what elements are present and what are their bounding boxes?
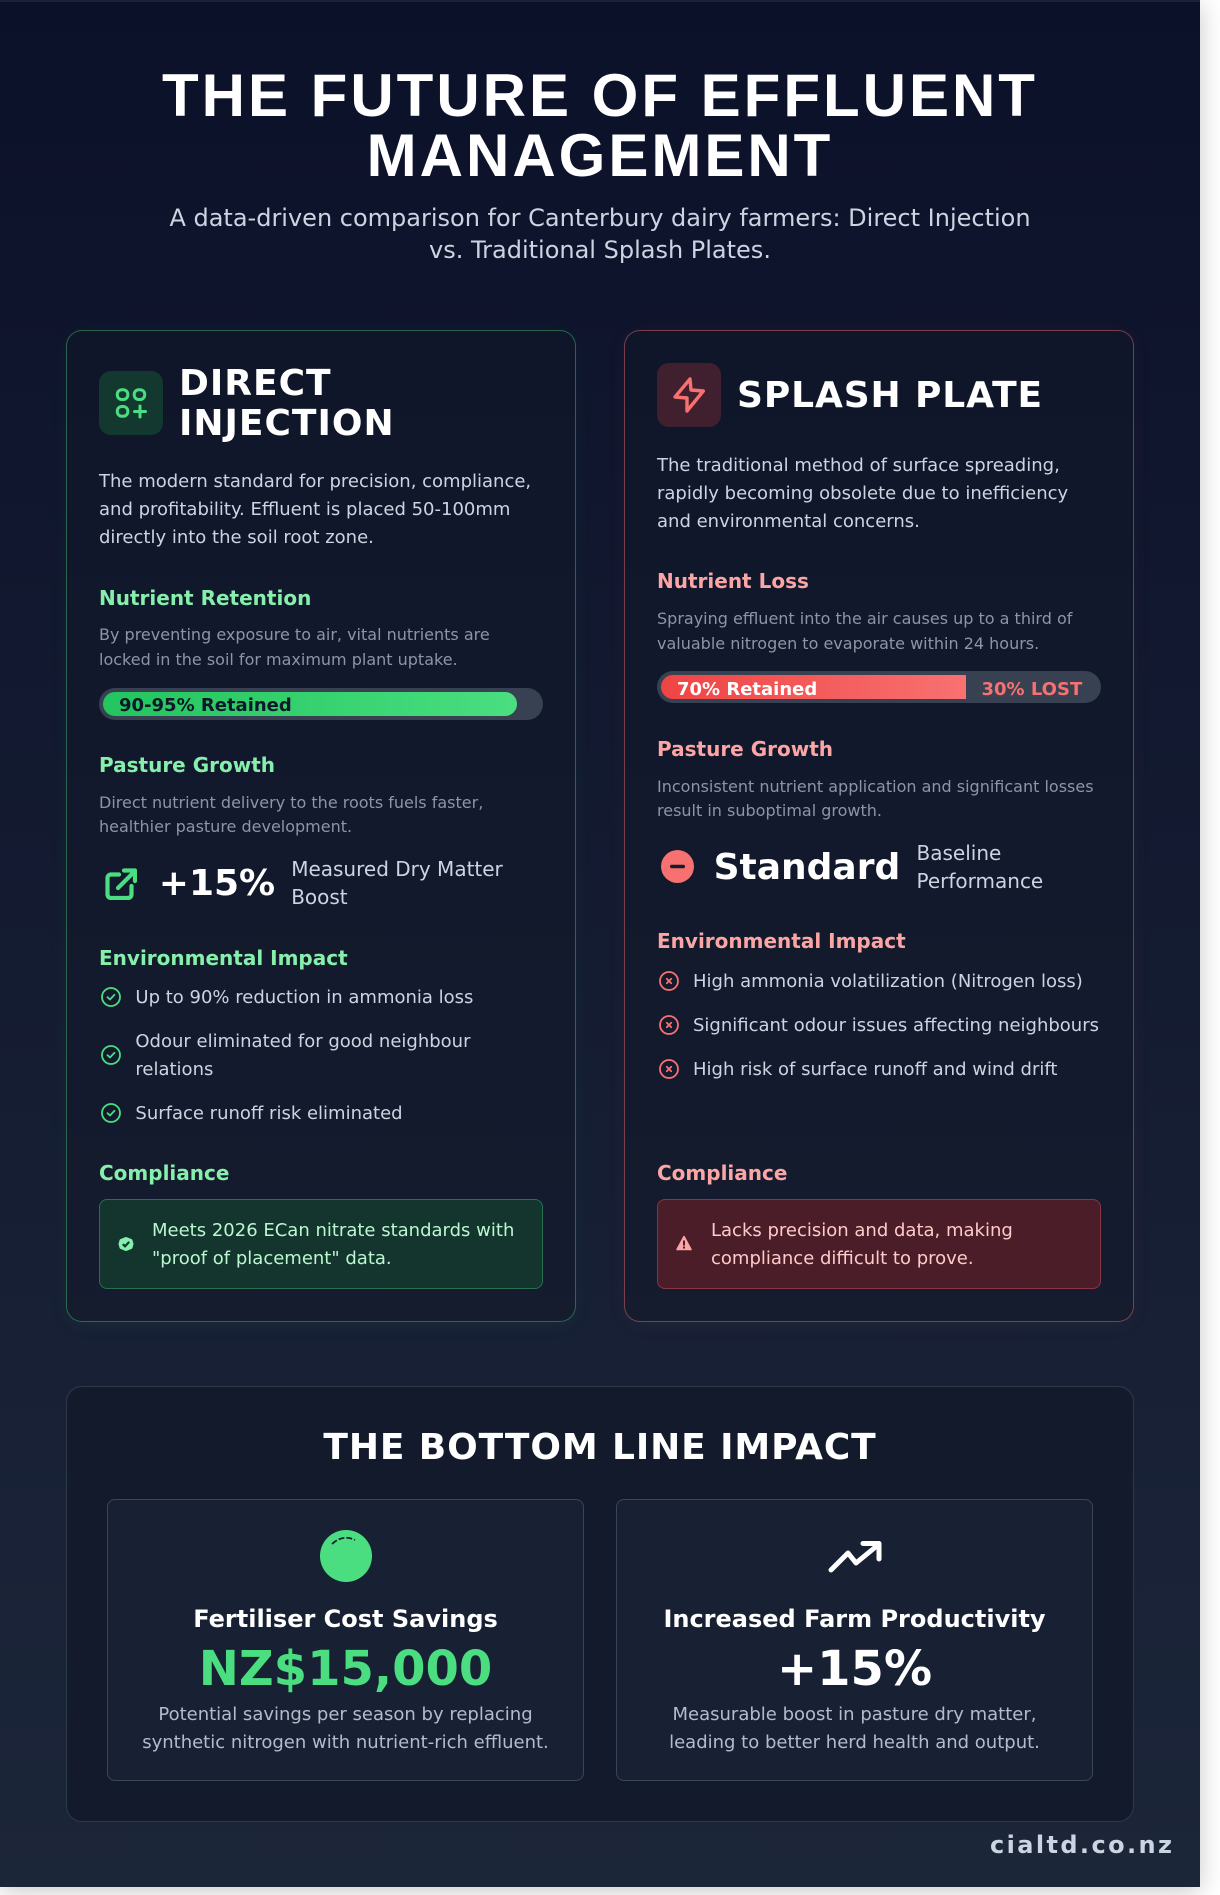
heading: pasture growth: Pasture Growth	[99, 753, 275, 777]
icon: cross	[659, 1059, 679, 1079]
pasture growth description: Inconsistent nutrient application and significant losses	[657, 777, 1094, 796]
heading: increased farm productivity: Increased Farm Productivity	[663, 1605, 1046, 1633]
progress bar: 90-95% retained	[99, 688, 543, 720]
title	[162, 62, 1038, 189]
list item: Odour eliminated for good neighbour	[135, 1031, 470, 1052]
icon: trending up arrow	[828, 1541, 882, 1572]
icon: splash plate	[657, 363, 721, 427]
heading: direct injection: DIRECT	[179, 362, 332, 404]
stat: standard: Standard	[714, 847, 900, 888]
stat: +15%: +15%	[159, 863, 275, 904]
pasture growth description: result in suboptimal growth.	[657, 801, 882, 820]
icon: minus circle	[661, 850, 694, 883]
list item: relations	[135, 1059, 213, 1080]
value: NZ$15,000: NZ$15,000	[199, 1641, 492, 1697]
stat label	[916, 840, 1043, 893]
compliance text: Meets 2026 ECan nitrate standards with	[152, 1220, 514, 1241]
heading: nutrient loss: Nutrient Loss	[657, 569, 809, 593]
title: MANAGEMENT	[367, 122, 833, 189]
icon: cross	[659, 1015, 679, 1035]
icon: check	[101, 987, 121, 1007]
nutrient retention description	[99, 625, 490, 669]
title: THE FUTURE OF EFFLUENT	[162, 62, 1038, 129]
list item: High ammonia volatilization (Nitrogen loss)	[693, 971, 1083, 992]
icon: cross	[659, 971, 679, 991]
icon: check	[101, 1103, 121, 1123]
card: fertiliser cost savings	[107, 1499, 584, 1781]
list item	[135, 1031, 470, 1080]
list item: Up to 90% reduction in ammonia loss	[135, 987, 473, 1008]
progress bar: 70% retained, 30% lost	[657, 671, 1101, 703]
heading: compliance: Compliance	[657, 1161, 787, 1185]
icon: direct injection	[99, 371, 163, 435]
nutrient loss description: valuable nitrogen to evaporate within 24 hours.	[657, 634, 1039, 653]
callout: compliance	[99, 1199, 543, 1289]
savings description: synthetic nitrogen with nutrient-rich effluent.	[142, 1732, 549, 1753]
intro text: The modern standard for precision, compliance,	[99, 471, 531, 492]
icon: warning triangle	[676, 1236, 692, 1250]
pasture growth description	[657, 777, 1094, 820]
nutrient loss description: Spraying effluent into the air causes up to a third of	[657, 609, 1072, 628]
icon: badge check	[118, 1237, 134, 1251]
heading: direct injection: INJECTION	[179, 402, 395, 444]
bar label: 70% Retained	[677, 679, 817, 700]
compliance text: "proof of placement" data.	[152, 1248, 392, 1269]
icon: coin	[320, 1530, 372, 1582]
heading: pasture growth: Pasture Growth	[657, 737, 833, 761]
stat label: Measured Dry Matter	[291, 857, 503, 881]
stat label	[291, 857, 503, 909]
productivity description: Measurable boost in pasture dry matter,	[672, 1704, 1036, 1725]
icon: external link arrow	[105, 868, 137, 900]
footer: website: cialtd.co.nz	[990, 1831, 1174, 1859]
intro text: and environmental concerns.	[657, 511, 920, 532]
compliance text: compliance difficult to prove.	[711, 1248, 974, 1269]
compliance text: Lacks precision and data, making	[711, 1220, 1013, 1241]
compliance text	[711, 1220, 1013, 1269]
heading: direct injection	[179, 362, 395, 444]
subtitle: A data-driven comparison for Canterbury dairy farmers: Direct Injection	[169, 204, 1031, 232]
pasture growth description: healthier pasture development.	[99, 817, 352, 836]
heading: nutrient retention: Nutrient Retention	[99, 586, 311, 610]
heading: environmental impact: Environmental Impact	[657, 929, 906, 953]
savings description	[142, 1704, 549, 1753]
list item: Significant odour issues affecting neighbours	[693, 1015, 1099, 1036]
pasture growth description: Direct nutrient delivery to the roots fuels faster,	[99, 793, 483, 812]
nutrient retention description: locked in the soil for maximum plant uptake.	[99, 650, 458, 669]
heading: fertiliser cost savings: Fertiliser Cost Savings	[193, 1605, 498, 1633]
productivity description: leading to better herd health and output.	[669, 1732, 1040, 1753]
compliance text	[152, 1220, 514, 1269]
card: increased farm productivity	[616, 1499, 1093, 1781]
pasture growth description	[99, 793, 483, 836]
intro text: rapidly becoming obsolete due to inefficiency	[657, 483, 1068, 504]
bar fill	[661, 675, 966, 699]
heading: bottom line impact: THE BOTTOM LINE IMPACT	[323, 1427, 877, 1468]
lost label: 30% LOST	[982, 679, 1082, 700]
nutrient loss description	[657, 609, 1073, 653]
panel: bottom line impact	[66, 1386, 1134, 1822]
intro text: The traditional method of surface spreading,	[657, 455, 1060, 476]
list item: Surface runoff risk eliminated	[135, 1103, 403, 1124]
intro text: directly into the soil root zone.	[99, 527, 374, 548]
heading: environmental impact: Environmental Impact	[99, 946, 348, 970]
value: +15%: +15%	[777, 1641, 932, 1697]
icon: check	[101, 1045, 121, 1065]
panel: splash plate	[624, 330, 1134, 1322]
subtitle: vs. Traditional Splash Plates.	[429, 236, 771, 264]
intro text	[98, 471, 531, 548]
callout: compliance	[657, 1199, 1101, 1289]
intro text	[656, 455, 1068, 532]
bar label: 90-95% Retained	[119, 695, 292, 716]
savings description: Potential savings per season by replacing	[158, 1704, 533, 1725]
stat label: Performance	[916, 869, 1043, 893]
list item: High risk of surface runoff and wind drift	[693, 1059, 1057, 1080]
panel: direct injection	[66, 330, 576, 1322]
heading: compliance: Compliance	[99, 1161, 229, 1185]
heading: splash plate: SPLASH PLATE	[737, 375, 1043, 416]
productivity description	[669, 1704, 1040, 1753]
subtitle	[169, 204, 1031, 264]
bar fill	[103, 692, 517, 716]
nutrient retention description: By preventing exposure to air, vital nutrients are	[99, 625, 490, 644]
stat label: Boost	[291, 885, 348, 909]
stat label: Baseline	[916, 840, 1001, 864]
intro text: and profitability. Effluent is placed 50-100mm	[99, 499, 510, 520]
